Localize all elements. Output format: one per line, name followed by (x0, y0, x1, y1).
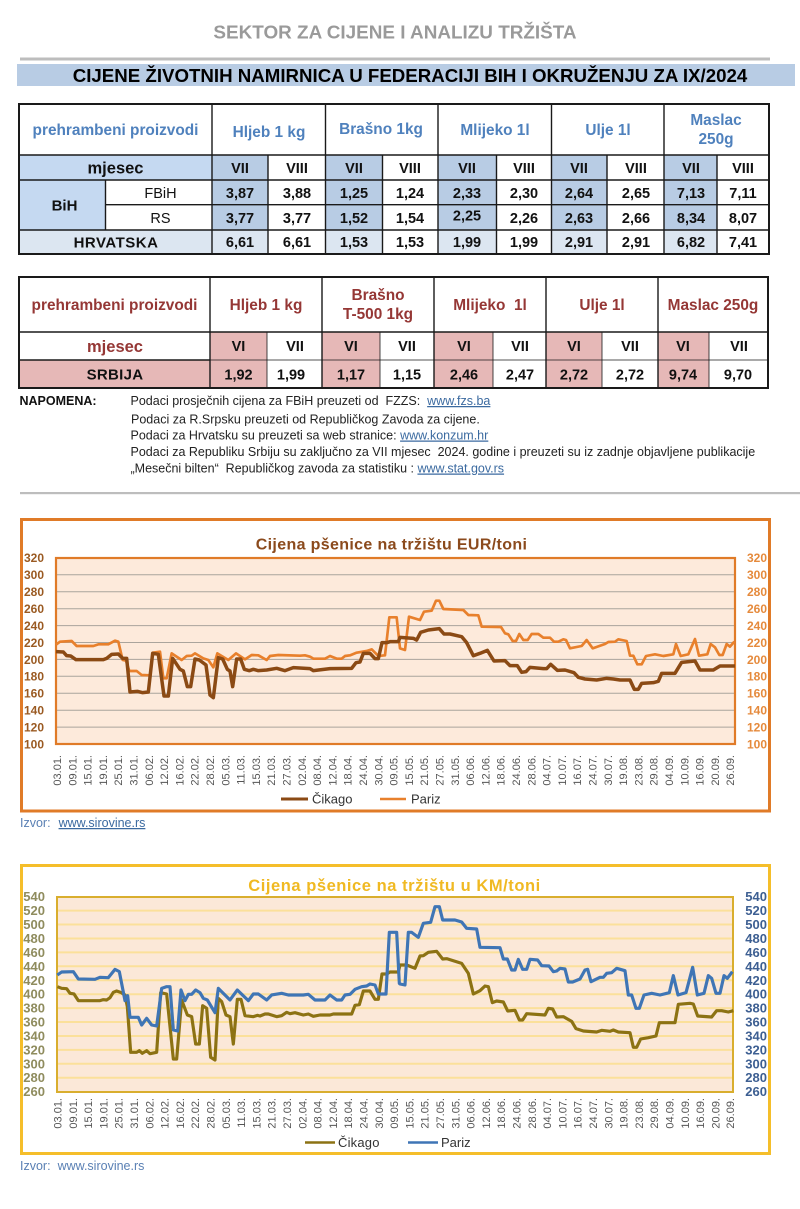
left axis EUR (24, 551, 44, 752)
left axis KM: 520 (23, 903, 45, 918)
table: BiH and Croatia prices: 1,25 (340, 186, 368, 202)
table: Serbia prices: 1,92 (224, 368, 253, 384)
table: BiH and Croatia prices: 1,53 (396, 235, 424, 251)
date axis EUR: 05.03. (220, 755, 232, 786)
right axis EUR: 120 (747, 720, 767, 734)
date axis KM: 08.04. (313, 1098, 325, 1129)
table: BiH and Croatia prices (19, 104, 769, 254)
table: BiH and Croatia prices: Hljeb 1 kg (233, 124, 305, 141)
right axis EUR: 160 (747, 686, 767, 700)
date axis KM: 24.07. (588, 1098, 600, 1129)
table: BiH and Croatia prices: 2,26 (510, 211, 538, 227)
date axis KM: 16.07. (573, 1098, 585, 1129)
left axis KM: 340 (23, 1028, 45, 1044)
date axis EUR: 16.09. (695, 755, 707, 786)
date axis KM: 19.08. (619, 1098, 631, 1129)
table: Serbia prices: VI (344, 339, 358, 355)
date axis KM: 04.09. (664, 1098, 676, 1129)
table: Serbia prices: VI (567, 339, 581, 355)
table: BiH and Croatia prices: 1,99 (453, 235, 481, 251)
legend KM (305, 1135, 471, 1150)
table: BiH and Croatia prices: 3,77 (226, 211, 254, 227)
table: BiH and Croatia prices: VIII (513, 161, 535, 177)
right axis KM: 400 (745, 986, 767, 1002)
table: BiH and Croatia prices: 7,41 (729, 235, 757, 251)
date axis EUR: 24.07. (588, 755, 600, 786)
table: BiH and Croatia prices: Ulje 1l (585, 122, 631, 139)
table: BiH and Croatia prices: 2,66 (622, 211, 650, 227)
left axis EUR: 280 (24, 585, 44, 599)
date axis KM: 23.08. (634, 1098, 646, 1129)
date axis EUR: 30.04. (373, 755, 385, 786)
table: Serbia prices: T-500 1kg (343, 306, 413, 323)
chart title KM: Cijena pšenice na tržištu u KM/toni (248, 877, 541, 895)
right axis EUR: 260 (747, 602, 767, 616)
table: BiH and Croatia prices: VIII (286, 161, 308, 177)
date axis EUR: 10.09. (679, 755, 691, 786)
right axis KM: 500 (745, 917, 767, 932)
date axis KM: 22.02. (190, 1098, 202, 1129)
table: BiH and Croatia prices: 2,63 (565, 211, 593, 227)
panel: wheat price chart KM per tonne (22, 866, 770, 1154)
table: Serbia prices: VI (457, 339, 471, 355)
date axis EUR: 03.01. (52, 755, 64, 786)
left axis EUR: 320 (24, 551, 44, 565)
date axis EUR: 28.02. (205, 755, 217, 786)
date axis KM: 18.04. (343, 1098, 355, 1129)
left axis EUR: 220 (24, 636, 44, 650)
date axis EUR: 19.01. (98, 755, 110, 786)
right axis KM: 320 (745, 1042, 767, 1058)
table: Serbia prices: 1,99 (277, 368, 305, 384)
table: BiH and Croatia prices: 8,34 (677, 211, 705, 227)
table: BiH and Croatia prices: Maslac (690, 112, 742, 129)
table: Serbia prices: 2,72 (616, 368, 644, 384)
table: BiH and Croatia prices: 6,82 (677, 235, 705, 251)
legend KM: Čikago (338, 1135, 380, 1150)
table: BiH and Croatia prices: 1,52 (340, 211, 368, 227)
date axis KM: 12.06. (481, 1098, 493, 1129)
date axis EUR: 04.09. (664, 755, 676, 786)
table: BiH and Croatia prices: 8,07 (729, 211, 757, 227)
right axis EUR (747, 551, 767, 752)
right axis KM: 480 (745, 931, 767, 946)
table: BiH and Croatia prices: VII (458, 161, 476, 177)
table: Serbia prices: 1,17 (337, 368, 365, 384)
date axis KM: 04.07. (542, 1098, 554, 1129)
right axis KM: 380 (745, 1000, 767, 1016)
legend EUR: Pariz (411, 792, 441, 806)
date axis KM: 31.05. (450, 1098, 462, 1129)
date axis EUR: 06.06. (465, 755, 477, 786)
right axis EUR: 320 (747, 551, 767, 565)
table: Serbia prices: Maslac 250g (668, 297, 758, 314)
table: BiH and Croatia prices: 7,11 (729, 186, 757, 202)
table: BiH and Croatia prices: 2,91 (622, 235, 650, 251)
table: Serbia prices: Mlijeko 1l (453, 297, 527, 314)
right axis EUR: 240 (747, 619, 767, 633)
date axis EUR: 21.05. (419, 755, 431, 786)
date axis KM: 15.03. (251, 1098, 263, 1129)
line: Čikago KM (57, 951, 733, 1060)
table: BiH and Croatia prices: 1,99 (510, 235, 538, 251)
right axis EUR: 220 (747, 636, 767, 650)
date axis KM: 30.07. (603, 1098, 615, 1129)
legend EUR (281, 792, 441, 806)
table: BiH and Croatia prices: 3,87 (226, 186, 254, 202)
date axis KM: 18.06. (496, 1098, 508, 1129)
table: Serbia prices: prehrambeni proizvodi (32, 297, 197, 314)
heading: sector: SEKTOR ZA CIJENE I ANALIZU TRŽIŠTA (213, 22, 577, 44)
date axis KM: 10.09. (680, 1098, 692, 1129)
note text: Podaci za Republiku Srbiju su zaključno za VII mjesec 2024. godine i preuzeti su iz zadnje objavljene publikacije (130, 445, 755, 459)
right axis KM: 300 (745, 1056, 767, 1072)
date axis KM: 27.03. (282, 1098, 294, 1129)
left axis KM: 420 (23, 973, 45, 988)
table: Serbia prices (19, 277, 768, 388)
note text: „Mesečni bilten“ Republičkog zavoda za statistiku : www.stat.gov.rs (130, 462, 504, 476)
date axis EUR: 22.02. (190, 755, 202, 786)
note text: NAPOMENA: (20, 394, 97, 408)
left axis KM: 320 (23, 1042, 45, 1058)
date axis KM: 16.09. (695, 1098, 707, 1129)
date axis EUR: 19.08. (618, 755, 630, 786)
date axis EUR: 15.03. (251, 755, 263, 786)
left axis EUR: 140 (24, 704, 44, 718)
table: Serbia prices: Hljeb 1 kg (230, 297, 302, 314)
note text: Podaci za Hrvatsku su preuzeti sa web stranice: www.konzum.hr (130, 428, 488, 442)
source EUR chart: Izvor: www.sirovine.rs (20, 816, 145, 830)
left axis EUR: 200 (24, 653, 44, 667)
table: BiH and Croatia prices: 1,54 (396, 211, 424, 227)
date axis KM: 12.02. (160, 1098, 172, 1129)
table: Serbia prices: VI (232, 339, 245, 355)
date axis EUR: 24.04. (358, 755, 370, 786)
left axis KM: 480 (23, 931, 45, 946)
date axis KM: 26.09. (725, 1098, 737, 1129)
right axis KM: 420 (745, 973, 767, 988)
right axis EUR: 200 (747, 653, 767, 667)
right axis EUR: 280 (747, 585, 767, 599)
left axis KM: 460 (23, 945, 45, 960)
date axis EUR: 15.01. (83, 755, 95, 786)
left axis KM: 380 (23, 1000, 45, 1016)
left axis EUR: 120 (24, 720, 44, 734)
date axis EUR: 12.02. (159, 755, 171, 786)
table: Serbia prices: VII (286, 339, 304, 355)
right axis EUR: 140 (747, 704, 767, 718)
date axis KM: 12.04. (328, 1098, 340, 1129)
right axis KM: 260 (745, 1084, 767, 1099)
table: BiH and Croatia prices: 2,25 (453, 208, 481, 224)
table: Serbia prices: VII (511, 339, 529, 355)
date axis EUR: 02.04. (297, 755, 309, 786)
table: BiH and Croatia prices: 250g (698, 131, 734, 148)
table: BiH and Croatia prices: HRVATSKA (74, 234, 158, 252)
table: BiH and Croatia prices: BiH (52, 198, 77, 214)
date axis EUR: 29.08. (649, 755, 661, 786)
date axis KM: 24.04. (358, 1098, 370, 1129)
date axis KM: 20.09. (710, 1098, 722, 1129)
date axis EUR: 21.03. (266, 755, 278, 786)
date axis KM: 28.06. (527, 1098, 539, 1129)
left axis KM: 400 (23, 986, 45, 1002)
date axis KM: 15.01. (83, 1098, 95, 1129)
left axis EUR: 160 (24, 686, 44, 700)
table: BiH and Croatia prices: mjesec (88, 160, 143, 178)
table: BiH and Croatia prices: VIII (732, 161, 754, 177)
date axis KM: 30.04. (374, 1098, 386, 1129)
left axis KM (23, 889, 45, 1099)
date axis KM: 06.06. (466, 1098, 478, 1129)
date axis KM: 25.01. (114, 1098, 126, 1129)
table: Serbia prices: Ulje 1l (579, 297, 625, 314)
date axis KM: 27.05. (435, 1098, 447, 1129)
date axis KM: 09.05. (389, 1098, 401, 1129)
date axis EUR: 27.05. (434, 755, 446, 786)
table: BiH and Croatia prices: 6,61 (226, 235, 254, 251)
date axis EUR: 25.01. (113, 755, 125, 786)
legend KM: Pariz (441, 1135, 471, 1150)
table: Serbia prices: 1,15 (393, 368, 421, 384)
date axis KM: 15.05. (404, 1098, 416, 1129)
date axis EUR: 12.06. (480, 755, 492, 786)
left axis EUR: 100 (24, 738, 44, 752)
table: BiH and Croatia prices: VII (570, 161, 588, 177)
table: Serbia prices: VII (621, 339, 639, 355)
date axis EUR: 16.07. (572, 755, 584, 786)
date axis KM: 03.01. (52, 1098, 64, 1129)
table: Serbia prices: 9,74 (669, 368, 697, 384)
date axis EUR: 18.04. (343, 755, 355, 786)
date axis KM: 29.08. (649, 1098, 661, 1129)
table: BiH and Croatia prices: VII (682, 161, 700, 177)
date axis KM: 09.01. (68, 1098, 80, 1129)
table: BiH and Croatia prices: 2,91 (565, 235, 593, 251)
date axis EUR: 15.05. (404, 755, 416, 786)
left axis KM: 440 (23, 959, 45, 974)
left axis EUR: 180 (24, 670, 44, 684)
date axis KM: 06.02. (144, 1098, 156, 1129)
right axis EUR: 100 (747, 738, 767, 752)
date axis EUR: 10.07. (557, 755, 569, 786)
date axis EUR: 26.09. (725, 755, 737, 786)
left axis EUR: 240 (24, 619, 44, 633)
date axis EUR: 06.02. (144, 755, 156, 786)
left axis KM: 360 (23, 1014, 45, 1030)
table: Serbia prices: 9,70 (724, 368, 752, 384)
plot area EUR (56, 558, 735, 744)
table: BiH and Croatia prices: 1,53 (340, 235, 368, 251)
table: BiH and Croatia prices: 2,65 (622, 186, 650, 202)
date axis EUR: 31.05. (450, 755, 462, 786)
date axis KM: 21.05. (420, 1098, 432, 1129)
date axis EUR: 09.05. (389, 755, 401, 786)
table: BiH and Croatia prices: VIII (625, 161, 647, 177)
table: BiH and Croatia prices: 3,77 (283, 211, 311, 227)
date axis EUR: 11.03. (236, 755, 248, 785)
table: Serbia prices: VI (676, 339, 690, 355)
source KM chart: Izvor: www.sirovine.rs (20, 1159, 144, 1173)
date axis EUR: 27.03. (282, 755, 294, 786)
date axis EUR: 24.06. (511, 755, 523, 786)
table: BiH and Croatia prices: prehrambeni proizvodi (33, 122, 198, 139)
table: Serbia prices: 2,72 (560, 368, 588, 384)
date axis KM: 05.03. (221, 1098, 233, 1129)
table: Serbia prices: SRBIJA (87, 366, 143, 384)
date axis EUR: 12.04. (327, 755, 339, 786)
table: Serbia prices: 2,47 (506, 368, 534, 384)
table: BiH and Croatia prices: 1,24 (396, 186, 424, 202)
date axis EUR: 09.01. (67, 755, 79, 786)
table: BiH and Croatia prices: FBiH (144, 186, 177, 202)
date axis EUR: 28.06. (526, 755, 538, 786)
table: Serbia prices: 2,46 (450, 368, 478, 384)
right axis KM: 520 (745, 903, 767, 918)
left axis KM: 280 (23, 1070, 45, 1085)
date axis KM: 28.02. (206, 1098, 218, 1129)
date axis EUR: 23.08. (633, 755, 645, 786)
date axis KM: 02.04. (297, 1098, 309, 1129)
date axis EUR: 04.07. (542, 755, 554, 786)
table: Serbia prices: VII (398, 339, 416, 355)
date axis EUR: 31.01. (128, 755, 140, 786)
left axis EUR: 260 (24, 602, 44, 616)
table: BiH and Croatia prices: VIII (399, 161, 421, 177)
table: BiH and Croatia prices: RS (150, 211, 171, 227)
right axis KM: 460 (745, 945, 767, 960)
legend EUR: Čikago (312, 792, 352, 806)
date axis KM: 11.03. (236, 1098, 248, 1128)
line: Čikago EUR (56, 629, 735, 698)
date axis EUR (52, 755, 737, 786)
left axis KM: 540 (23, 889, 45, 904)
table: BiH and Croatia prices: VII (231, 161, 249, 177)
date axis KM: 21.03. (267, 1098, 279, 1129)
table: BiH and Croatia prices: 7,13 (677, 186, 705, 202)
right axis KM: 360 (745, 1014, 767, 1030)
plot area KM (57, 897, 733, 1092)
table: BiH and Croatia prices: 2,30 (510, 186, 538, 202)
table: BiH and Croatia prices: 2,33 (453, 186, 481, 202)
date axis EUR: 20.09. (710, 755, 722, 786)
date axis EUR: 30.07. (603, 755, 615, 786)
table: Serbia prices: mjesec (87, 338, 143, 356)
date axis EUR: 16.02. (174, 755, 186, 786)
left axis EUR: 300 (24, 568, 44, 582)
note text: Podaci prosječnih cijena za FBiH preuzeti od FZZS: www.fzs.ba (130, 394, 490, 408)
right axis EUR: 300 (747, 568, 767, 582)
right axis KM: 280 (745, 1070, 767, 1085)
table: BiH and Croatia prices: 3,88 (283, 186, 311, 202)
left axis KM: 260 (23, 1084, 45, 1099)
left axis KM: 300 (23, 1056, 45, 1072)
right axis KM: 440 (745, 959, 767, 974)
date axis EUR: 18.06. (496, 755, 508, 786)
table: BiH and Croatia prices: 2,64 (565, 186, 593, 202)
table: BiH and Croatia prices: VII (345, 161, 363, 177)
table: Serbia prices: VII (730, 339, 748, 355)
right axis KM: 340 (745, 1028, 767, 1044)
table: BiH and Croatia prices: Mlijeko 1l (460, 122, 530, 139)
date axis KM: 16.02. (175, 1098, 187, 1129)
date axis KM: 10.07. (557, 1098, 569, 1129)
right axis KM: 540 (745, 889, 767, 904)
right axis EUR: 180 (747, 670, 767, 684)
note text (20, 394, 755, 476)
line: Pariz EUR (56, 601, 734, 678)
date axis EUR: 08.04. (312, 755, 324, 786)
line: Pariz KM (57, 907, 732, 1031)
panel: wheat price chart EUR per tonne (22, 520, 770, 811)
chart title EUR: Cijena pšenice na tržištu EUR/toni (256, 536, 527, 554)
table: Serbia prices: Brašno (351, 287, 405, 304)
note text: Podaci za R.Srpsku preuzeti od Republičkog Zavoda za cijene. (131, 412, 480, 426)
right axis KM (745, 889, 767, 1099)
table: BiH and Croatia prices: 6,61 (283, 235, 311, 251)
date axis KM: 31.01. (129, 1098, 141, 1129)
title band: CIJENE ŽIVOTNIH NAMIRNICA U FEDERACIJI BIH I OKRUŽENJU ZA IX/2024 (73, 65, 748, 86)
table: BiH and Croatia prices: Brašno 1kg (339, 121, 423, 138)
date axis KM (52, 1098, 737, 1129)
date axis KM: 19.01. (98, 1098, 110, 1129)
date axis KM: 24.06. (512, 1098, 524, 1129)
left axis KM: 500 (23, 917, 45, 932)
